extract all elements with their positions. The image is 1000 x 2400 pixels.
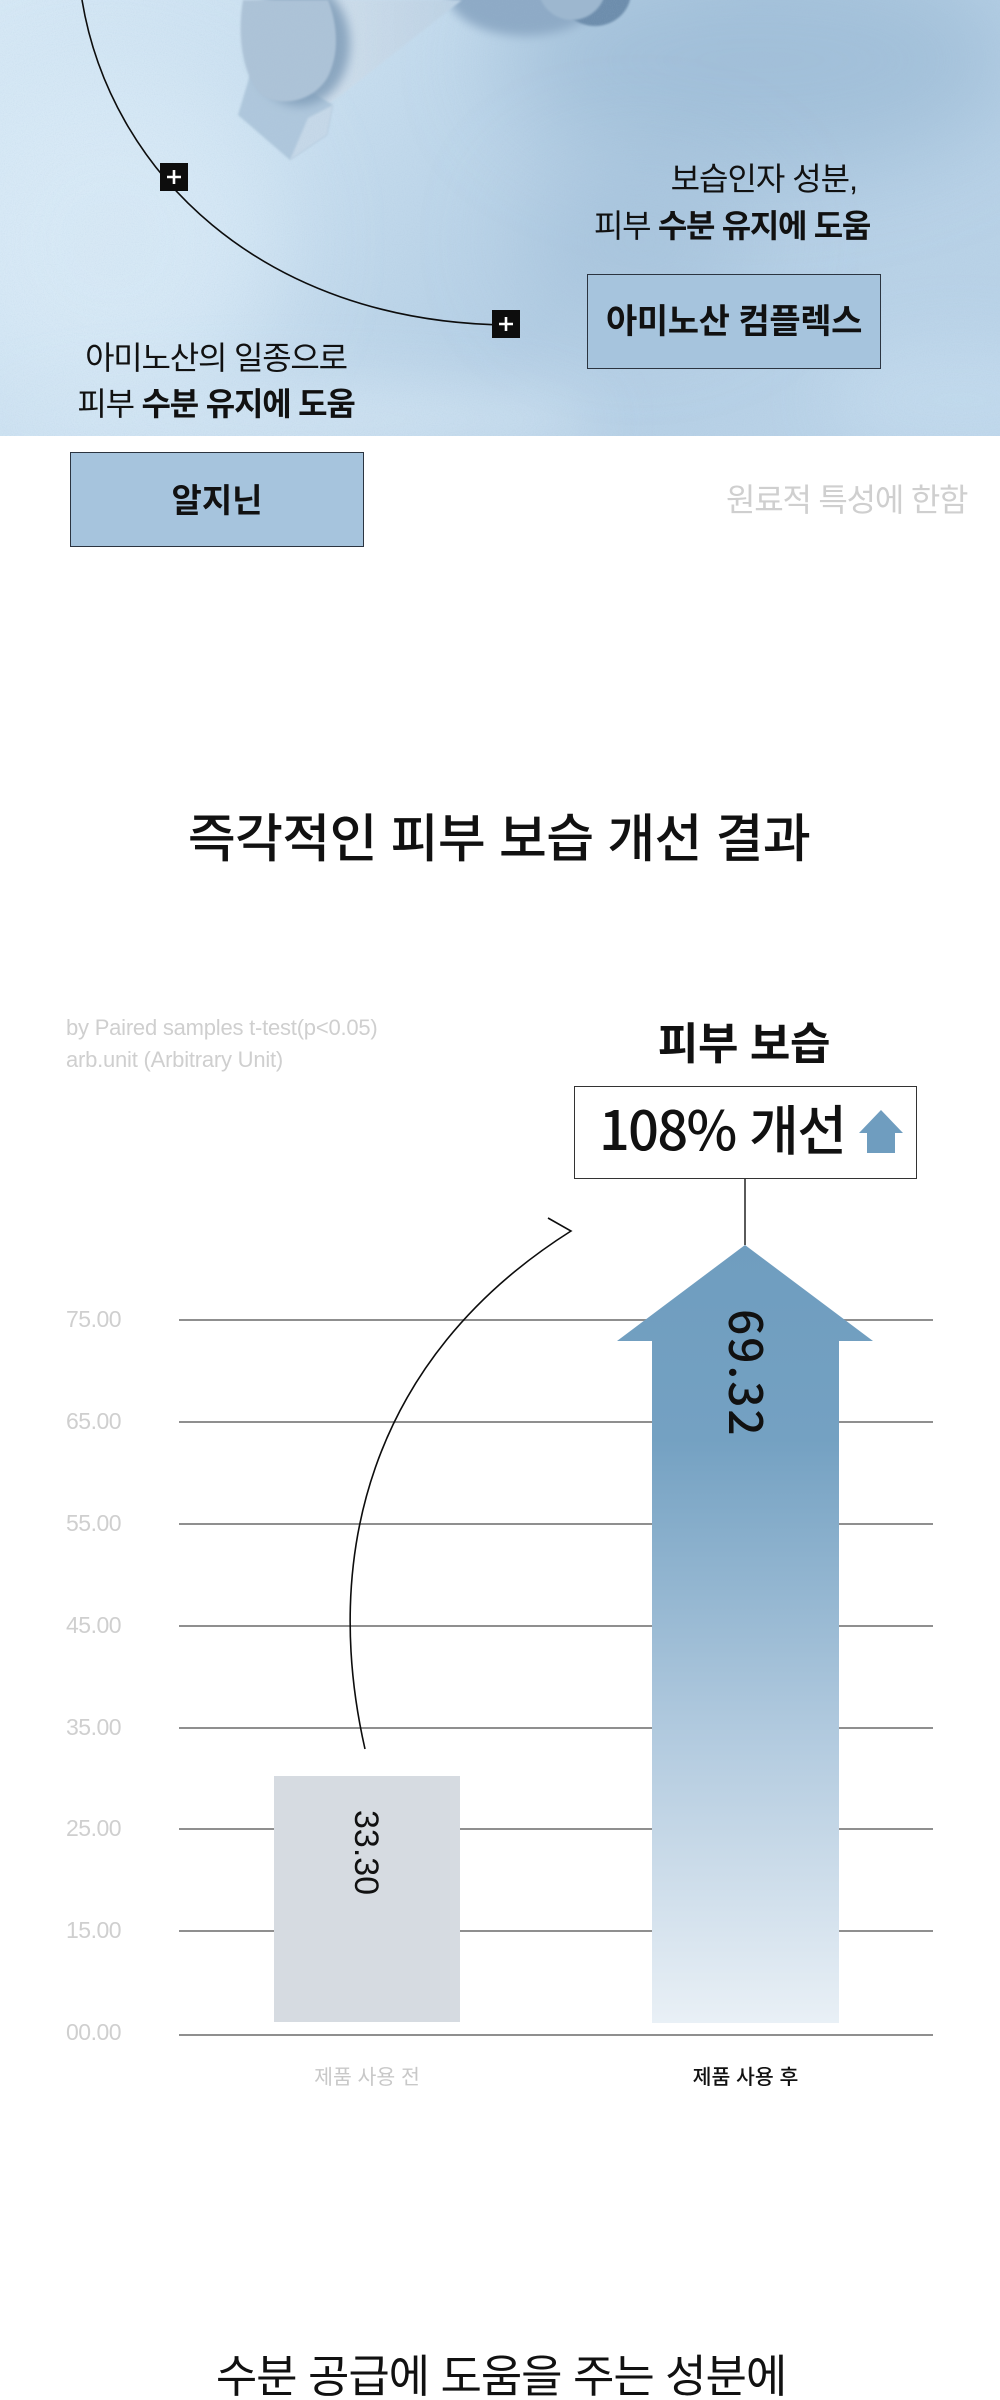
statistics notes [66,1015,378,1072]
x axis label: before: 제품 사용 전 [314,2066,420,2089]
product: ball shadow and cap [447,0,631,36]
bar: before use [274,1776,460,2022]
bar chart: skin hydration before and after [66,1179,933,2089]
product: tube body and tip [238,0,462,160]
y axis labels and grid lines: 35.00 [66,1714,121,1740]
text: arginine description: 피부 수분 유지에 도움 [77,386,355,422]
text: humectant description: 피부 수분 유지에 도움 [594,208,870,244]
y axis labels and grid lines: 00.00 [66,2019,121,2045]
icon: small up arrow [859,1110,903,1153]
statistics notes: by Paired samples t-test(p<0.05) [66,1015,378,1040]
text: arginine description [77,340,355,422]
text: arginine description: 아미노산의 일종으로 [85,340,347,376]
y axis labels and grid lines: 25.00 [66,1815,121,1841]
label box: arginine [70,452,364,547]
callout box: 108% improvement [574,1086,917,1179]
text: humectant description: 보습인자 성분, [671,161,857,197]
label box: arginine: 알지닌 [171,482,263,518]
statistics notes: arb.unit (Arbitrary Unit) [66,1047,283,1072]
heading: 즉각적인 피부 보습 개선 결과 [188,811,810,869]
text: humectant description [594,161,870,244]
y axis labels and grid lines: 55.00 [66,1510,121,1536]
callout title: skin hydration: 피부 보습 [658,1020,830,1069]
curved connector line with plus markers [81,0,520,338]
label box: amino acid complex [587,274,881,369]
value: 69.32: 69.32 [715,1309,781,1438]
value: 33.30: 33.30 [347,1810,385,1895]
y axis labels and grid lines: 15.00 [66,1917,121,1943]
y axis labels and grid lines: 75.00 [66,1306,121,1332]
y axis labels and grid lines: 45.00 [66,1612,121,1638]
x axis label: after: 제품 사용 후 [693,2066,798,2089]
y axis labels and grid lines [66,1306,933,2045]
callout box: 108% improvement: 108% 개선 [599,1087,845,1166]
note: raw material disclaimer: 원료적 특성에 한함 [726,482,967,518]
y axis labels and grid lines: 65.00 [66,1408,121,1434]
panel: product photo background [0,0,1000,436]
label box: amino acid complex: 아미노산 컴플렉스 [606,303,862,341]
